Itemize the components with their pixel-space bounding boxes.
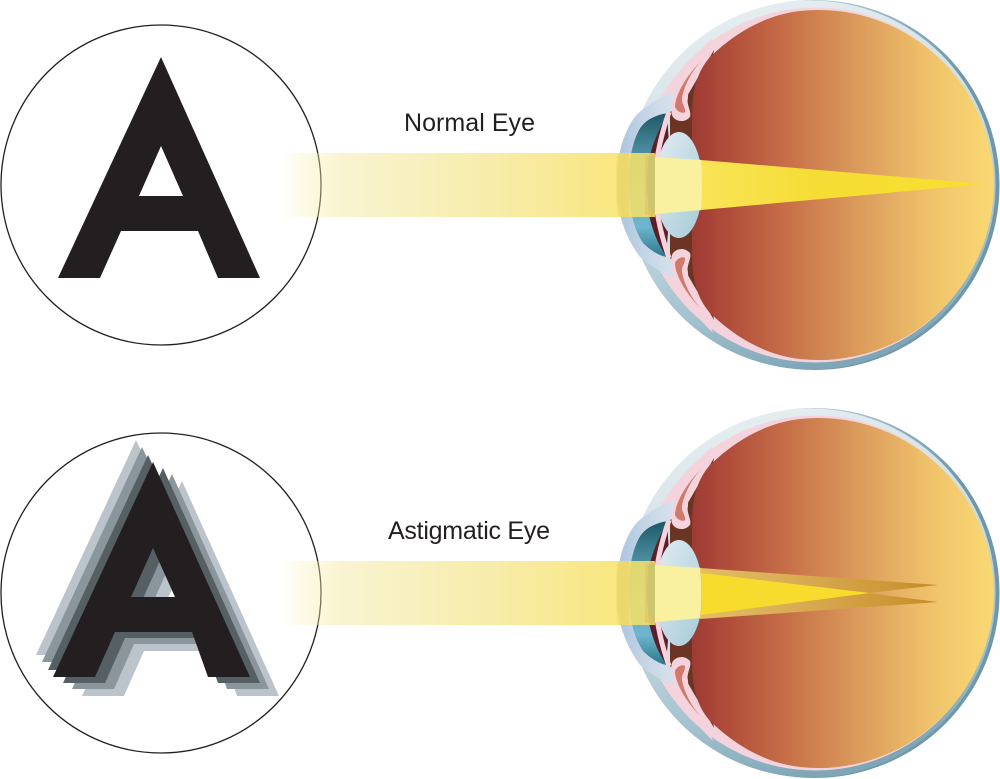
light beam: astigmatic eye bbox=[280, 561, 938, 625]
astigmatic focal bands bbox=[700, 568, 938, 619]
circle: astigmatic vision letter bbox=[1, 433, 321, 753]
focal cone bbox=[701, 160, 985, 210]
heading: Normal Eye: Normal Eye bbox=[404, 109, 535, 137]
letter A: blurred ghost layers bbox=[36, 440, 279, 696]
light beam: normal eye bbox=[280, 153, 985, 217]
focal cone bbox=[701, 573, 870, 615]
illustration: astigmatic eye bbox=[280, 408, 1000, 778]
illustration: normal eye bbox=[280, 0, 1000, 370]
circle: normal vision letter bbox=[1, 25, 321, 345]
heading: Astigmatic Eye: Astigmatic Eye bbox=[388, 517, 550, 545]
letter A: main bbox=[53, 462, 250, 677]
letter A: sharp bbox=[58, 57, 260, 278]
